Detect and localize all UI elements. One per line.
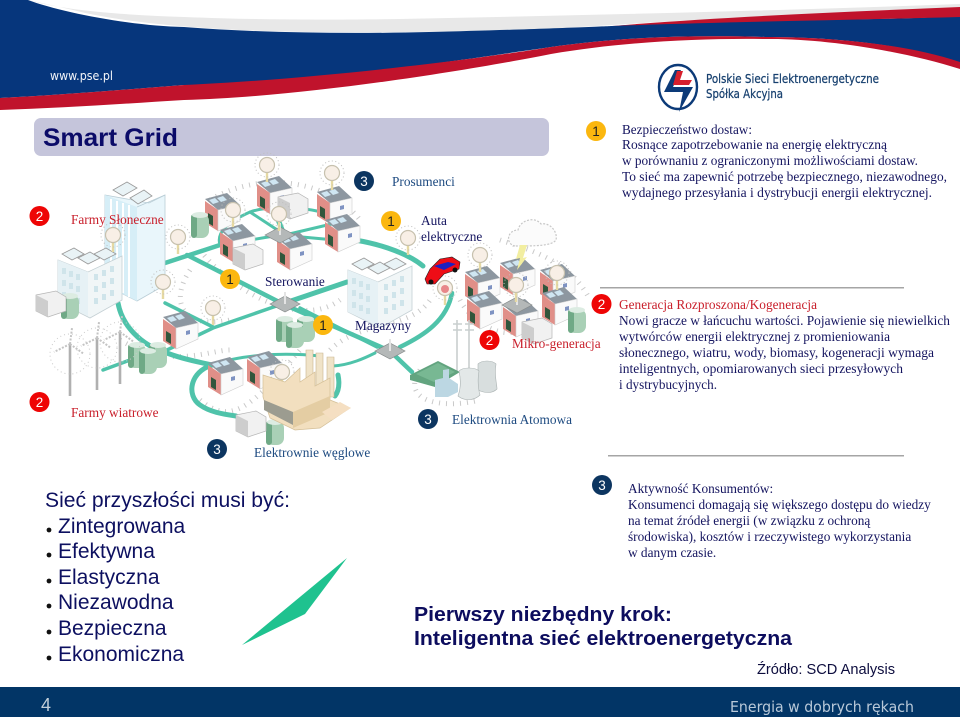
- badge and label: Sterowanie: [220, 269, 325, 289]
- badge and label: Farmy wiatrowe: [30, 392, 159, 420]
- text block: consumer activity: Konsumenci domagają się większego dostępu do wiedzy: [628, 497, 931, 512]
- badge and label: Mikro-generacja: 2: [486, 333, 493, 348]
- callout: first step: Inteligentna sieć elektroenergetyczna: [414, 627, 793, 650]
- text block: consumer activity: 3: [598, 478, 606, 493]
- title bar: Smart Grid: [34, 118, 549, 156]
- coal plant: [263, 350, 351, 430]
- text block: distributed generation: Generacja Rozproszona/Kogeneracja: [619, 297, 817, 312]
- buildings: [58, 182, 412, 328]
- teal grid lines: [103, 200, 452, 416]
- footer bar: Energia w dobrych rękach: [730, 698, 914, 716]
- badge and label: Mikro-generacja: Mikro-generacja: [512, 336, 601, 351]
- logo: PSE: [659, 65, 879, 112]
- header swoosh: [0, 0, 960, 110]
- badge and label: Auta elektryczne: elektryczne: [421, 229, 482, 244]
- footer bar: 4: [41, 695, 51, 715]
- text block: distributed generation: i dystrybucyjnych.: [619, 377, 717, 392]
- list: future grid requirements: Bezpieczna: [58, 617, 167, 640]
- nuclear plant: [410, 320, 497, 400]
- badge and label: Elektrownia Atomowa: 3: [424, 412, 432, 427]
- text block: distributed generation: 2: [598, 297, 605, 312]
- logo: PSE: Polskie Sieci Elektroenergetyczne: [706, 72, 879, 86]
- badge and label: Prosumenci: 3: [360, 174, 368, 189]
- list: future grid requirements: Efektywna: [58, 540, 155, 563]
- list: future grid requirements: Elastyczna: [58, 566, 160, 589]
- badge: 1 security of supply: 1: [592, 124, 600, 139]
- text block: distributed generation: słonecznego, wiatru, wody, biomasy, kogeneracji wymaga: [619, 345, 934, 360]
- badge and label: Elektrownie węglowe: Elektrownie węglowe: [254, 445, 370, 460]
- badge and label: Auta elektryczne: [381, 211, 482, 244]
- badge and label: Elektrownia Atomowa: Elektrownia Atomowa: [452, 412, 572, 427]
- badge and label: Elektrownie węglowe: 3: [213, 442, 221, 457]
- badge and label: Farmy Słoneczne: [30, 206, 164, 227]
- badge and label: Auta elektryczne: 1: [387, 214, 395, 229]
- text block: security of supply: To sieć ma zapewnić potrzebę bezpiecznego, niezawodnego,: [622, 169, 947, 184]
- text block: distributed generation: wytwórców energii elektrycznej z promieniowania: [619, 329, 890, 344]
- hubs: [265, 223, 532, 359]
- footer bar: [0, 687, 960, 717]
- text block: distributed generation: Nowi gracze w łańcuchu wartości. Pojawienie się niewielkich: [619, 313, 950, 328]
- wind turbines: [50, 316, 140, 396]
- text block: security of supply: Rosnące zapotrzebowanie na energię elektryczną: [622, 137, 888, 152]
- badge and label: Farmy Słoneczne: 2: [36, 209, 43, 224]
- list: future grid requirements: Niezawodna: [58, 591, 174, 614]
- badge and label: Magazyny: Magazyny: [355, 318, 411, 333]
- houses: [163, 176, 577, 395]
- stippled background: [120, 183, 590, 412]
- badge and label: Elektrownia Atomowa: [418, 409, 572, 429]
- text block: security of supply: [622, 122, 947, 200]
- text block: consumer activity: środowiska), kosztów i rzeczywistego wykorzystania: [628, 529, 911, 544]
- website address: www.pse.pl: [50, 69, 113, 83]
- smart meters: [101, 153, 569, 389]
- badge and label: Farmy Słoneczne: Farmy Słoneczne: [71, 212, 164, 227]
- text block: distributed generation: inteligentnych, opomiarowanych sieci przesyłowych: [619, 361, 903, 376]
- text block: security of supply: Bezpieczeństwo dostaw:: [622, 122, 752, 137]
- list: future grid requirements: Sieć przyszłości musi być:: [45, 489, 290, 512]
- storage tanks and boxes: [36, 193, 586, 445]
- source note: Źródło: SCD Analysis: [757, 661, 895, 678]
- text block: consumer activity: w danym czasie.: [628, 545, 716, 560]
- badge and label: Sterowanie: Sterowanie: [265, 274, 325, 289]
- badge and label: Elektrownie węglowe: [207, 439, 370, 460]
- text block: security of supply: w porównaniu z ograniczonymi możliwościami dostaw.: [622, 153, 918, 168]
- badge and label: Prosumenci: [354, 171, 455, 191]
- callout: first step: [414, 603, 793, 650]
- text block: consumer activity: na temat źródeł energii (w związku z ochroną: [628, 513, 871, 528]
- badge and label: Sterowanie: 1: [226, 272, 234, 287]
- text block: distributed generation: [592, 287, 950, 392]
- electric car: [425, 257, 460, 293]
- text block: consumer activity: [592, 455, 931, 560]
- title bar: Smart Grid: Smart Grid: [43, 124, 178, 152]
- badge and label: Farmy wiatrowe: 2: [36, 395, 43, 410]
- list: future grid requirements: Zintegrowana: [58, 515, 186, 538]
- list: future grid requirements: Ekonomiczna: [58, 643, 184, 666]
- badge and label: Auta elektryczne: Auta: [421, 213, 447, 228]
- text block: security of supply: wydajnego przesyłania i dystrybucji energii elektrycznej.: [622, 185, 932, 200]
- green arrow shape: [242, 558, 347, 645]
- badge and label: Prosumenci: Prosumenci: [392, 174, 455, 189]
- text block: consumer activity: Aktywność Konsumentów:: [628, 481, 773, 496]
- badge and label: Mikro-generacja: [480, 330, 601, 351]
- callout: first step: Pierwszy niezbędny krok:: [414, 603, 672, 626]
- illustration: smart grid network: [36, 153, 590, 445]
- logo: PSE: Spółka Akcyjna: [706, 87, 783, 101]
- badge and label: Magazyny: [313, 315, 411, 335]
- badge and label: Farmy wiatrowe: Farmy wiatrowe: [71, 405, 159, 420]
- badge and label: Magazyny: 1: [319, 318, 327, 333]
- badge: 1 security of supply: [586, 121, 606, 141]
- list: future grid requirements: [45, 489, 290, 666]
- storm cloud: [509, 220, 556, 270]
